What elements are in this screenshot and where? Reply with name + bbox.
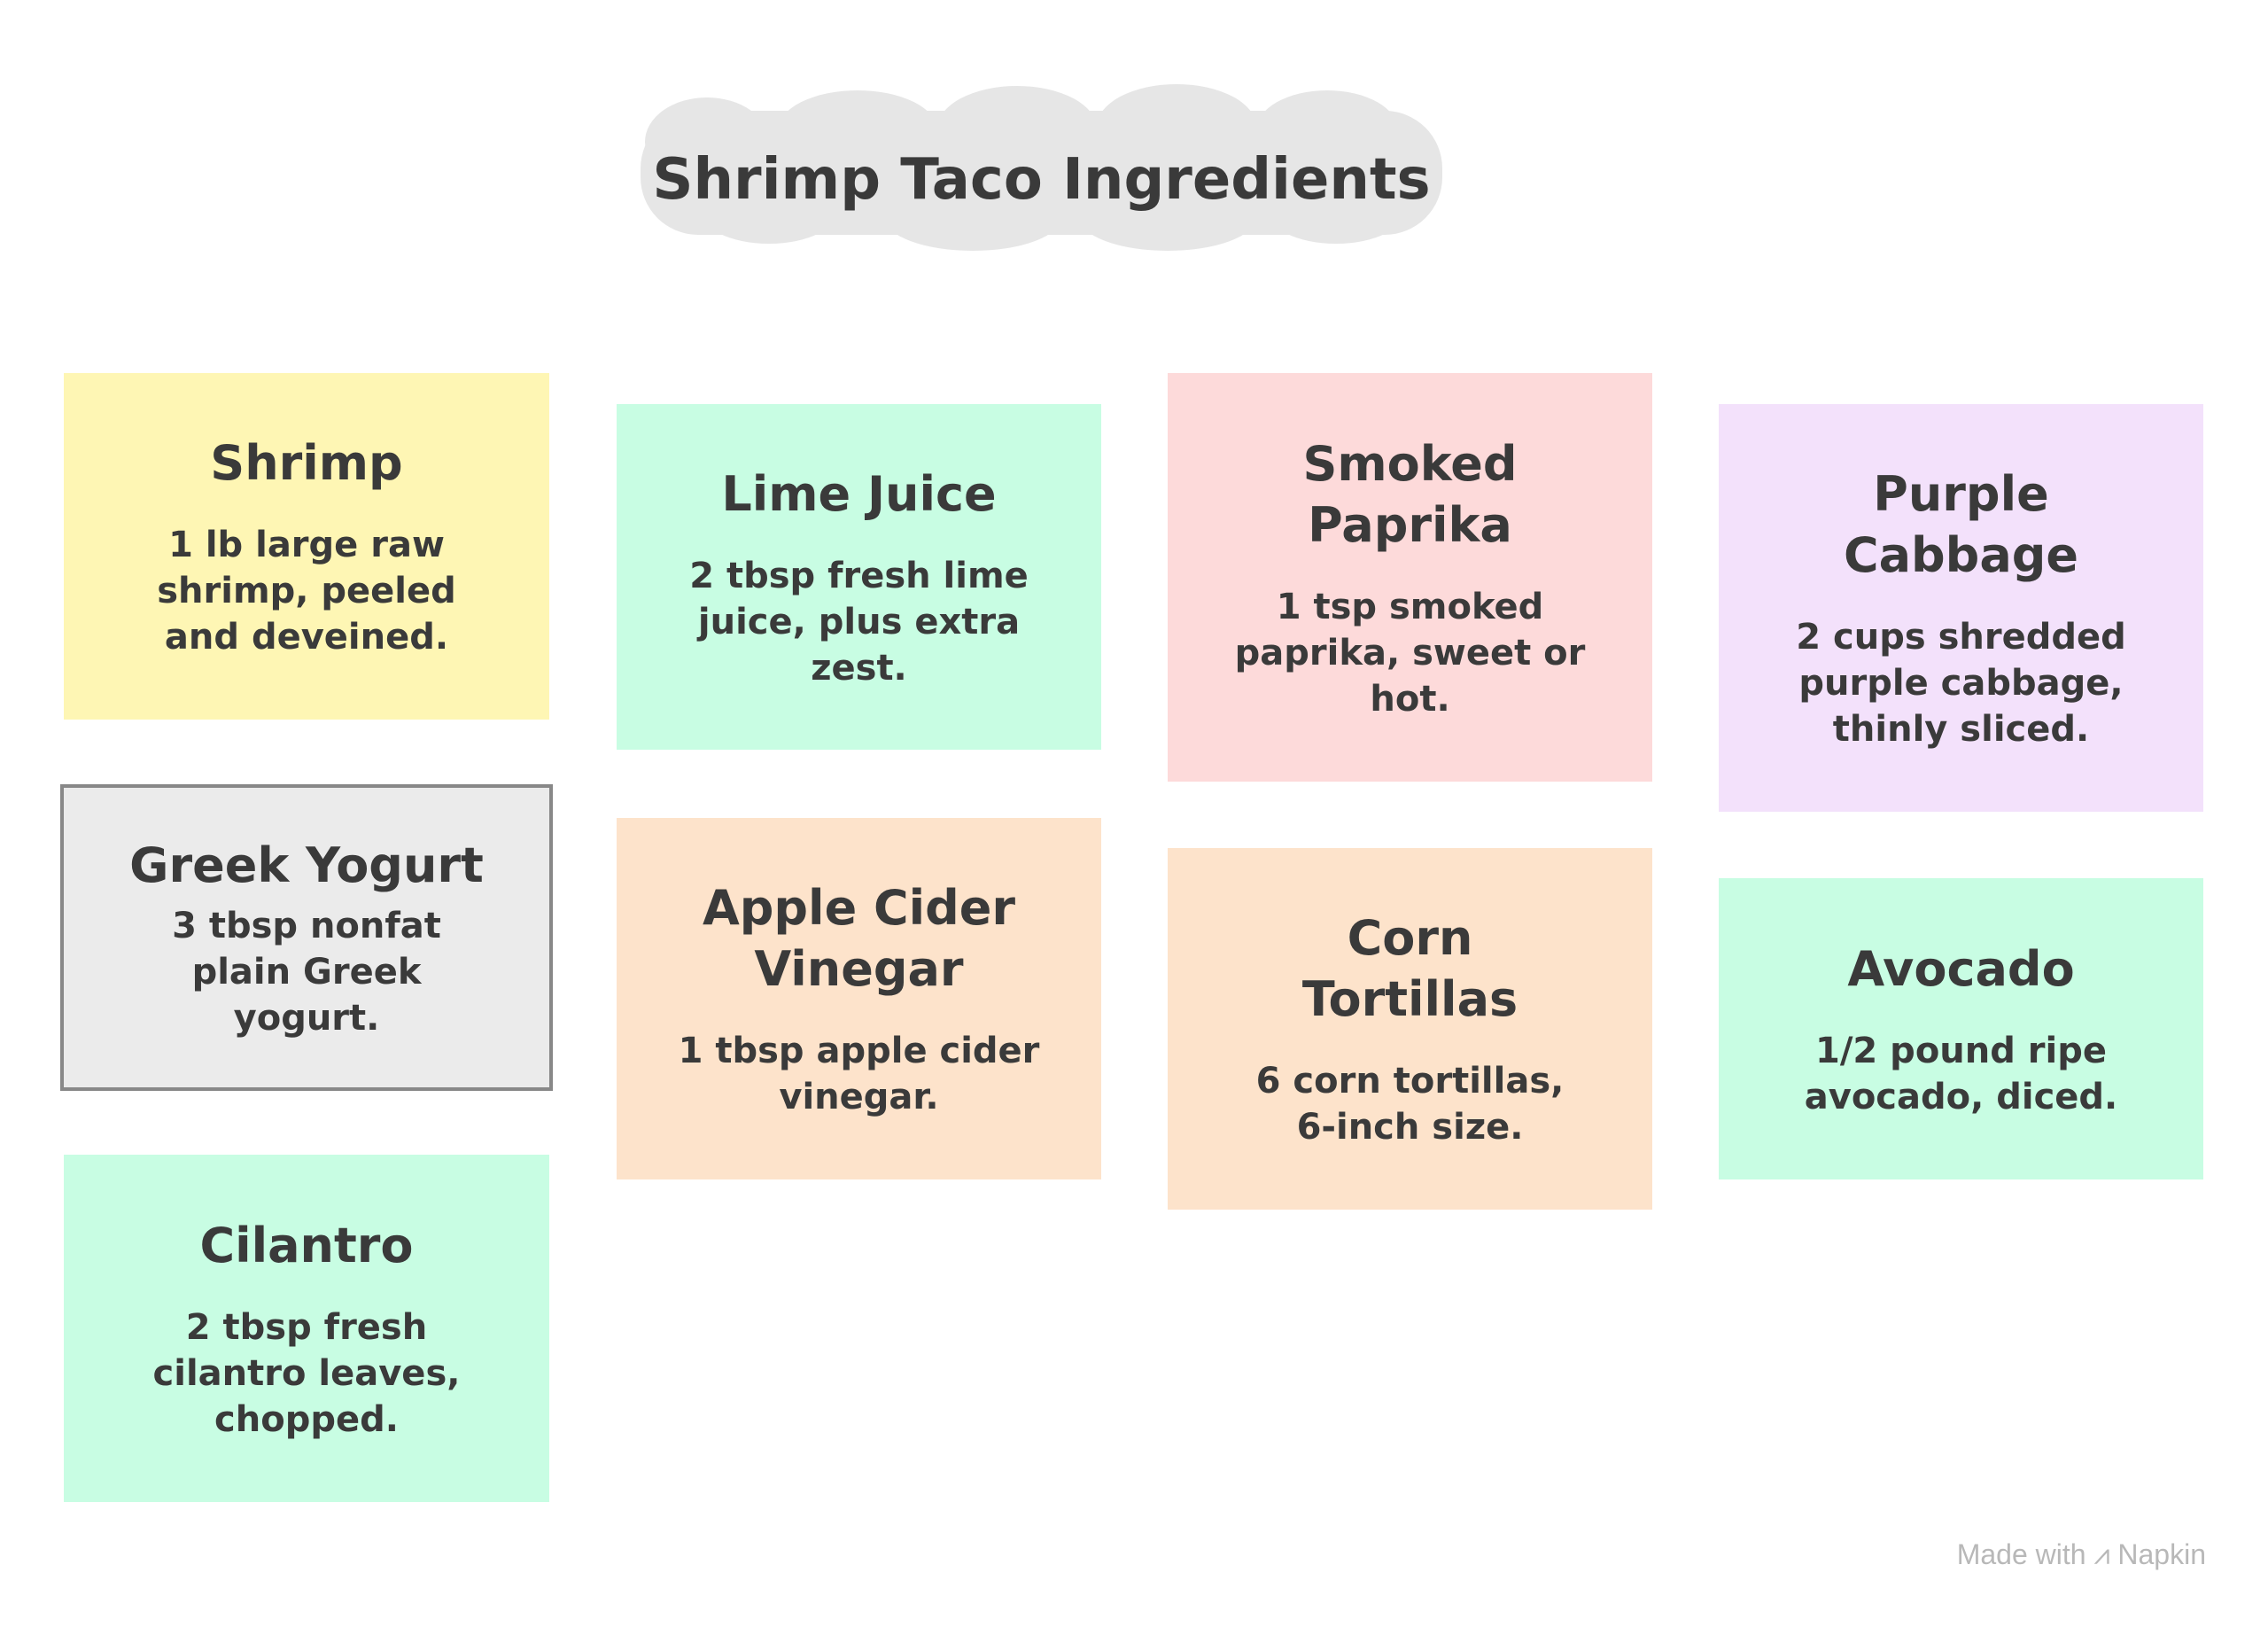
card: Corn Tortillas [1168, 848, 1652, 1210]
card: Avocado [1719, 878, 2203, 1179]
card: Smoked Paprika [1168, 373, 1652, 782]
card: Purple Cabbage [1719, 404, 2203, 812]
card: Lime Juice [617, 404, 1101, 750]
card: Purple Cabbage: Purple Cabbage [1844, 466, 2078, 583]
card: Lime Juice: Lime Juice [721, 466, 997, 521]
footer: made with napkin: Made with ⩘ Napkin [1957, 1538, 2206, 1570]
card: Smoked Paprika: 1 tsp smoked paprika, sweet or hot. [1235, 587, 1585, 720]
card: Greek Yogurt: 3 tbsp nonfat plain Greek yogurt. [172, 906, 441, 1039]
card: Corn Tortillas: 6 corn tortillas, 6-inch size. [1256, 1061, 1564, 1148]
card: Purple Cabbage: 2 cups shredded purple cabbage, thinly sliced. [1796, 617, 2126, 750]
card: Apple Cider Vinegar: Apple Cider Vinegar [703, 880, 1015, 997]
card: Greek Yogurt [60, 784, 553, 1091]
card: Corn Tortillas: Corn Tortillas [1302, 910, 1518, 1027]
card: Shrimp: 1 lb large raw shrimp, peeled and deveined. [157, 525, 456, 658]
card: Apple Cider Vinegar [617, 818, 1101, 1179]
card: Shrimp: Shrimp [210, 435, 403, 491]
card: Cilantro [64, 1155, 549, 1502]
card: Apple Cider Vinegar: 1 tbsp apple cider vinegar. [679, 1031, 1039, 1117]
card: Avocado: Avocado [1847, 941, 2075, 996]
title: Shrimp Taco Ingredients [652, 147, 1431, 213]
card: Smoked Paprika: Smoked Paprika [1302, 436, 1517, 553]
card: Shrimp [64, 373, 549, 720]
card: Lime Juice: 2 tbsp fresh lime juice, plus extra zest. [689, 555, 1029, 688]
card: Greek Yogurt: Greek Yogurt [129, 837, 484, 893]
card: Cilantro: Cilantro [199, 1218, 414, 1273]
card: Cilantro: 2 tbsp fresh cilantro leaves, chopped. [153, 1306, 460, 1439]
title cloud [641, 84, 1442, 251]
card: Avocado: 1/2 pound ripe avocado, diced. [1805, 1030, 2117, 1117]
